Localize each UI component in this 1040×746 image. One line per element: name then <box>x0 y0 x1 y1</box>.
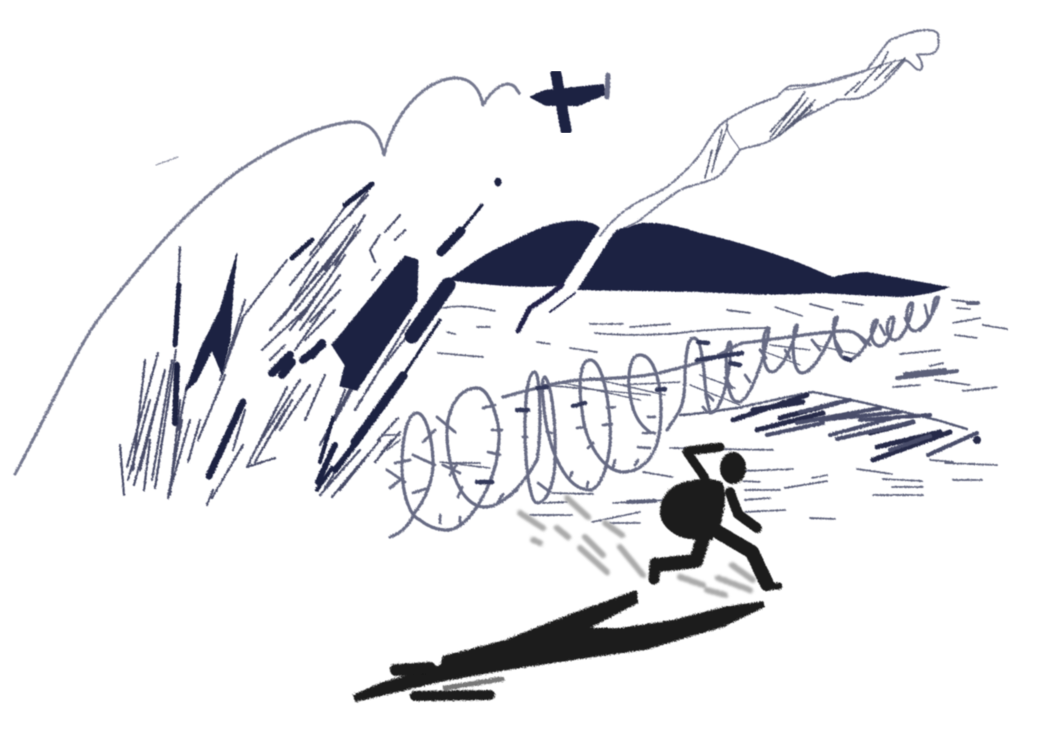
plane <box>531 74 608 130</box>
explosion hatching <box>120 183 420 505</box>
dark ridge in field <box>680 392 981 460</box>
runner's shadow <box>353 590 765 702</box>
explosion dark strokes <box>175 178 501 490</box>
figure: backpack and torso <box>660 479 725 540</box>
shadow: main body <box>353 590 765 702</box>
figure: limbs <box>654 447 779 587</box>
dust trail <box>520 498 753 595</box>
running figure <box>654 447 779 587</box>
explosion outline arc <box>15 78 519 474</box>
dark hill on horizon <box>448 221 950 331</box>
barbed wire coil <box>387 297 939 537</box>
figure: head <box>720 452 746 484</box>
foreground field dashes <box>383 300 1007 523</box>
shadow: side strokes <box>396 668 502 696</box>
smoke plume <box>600 30 939 236</box>
